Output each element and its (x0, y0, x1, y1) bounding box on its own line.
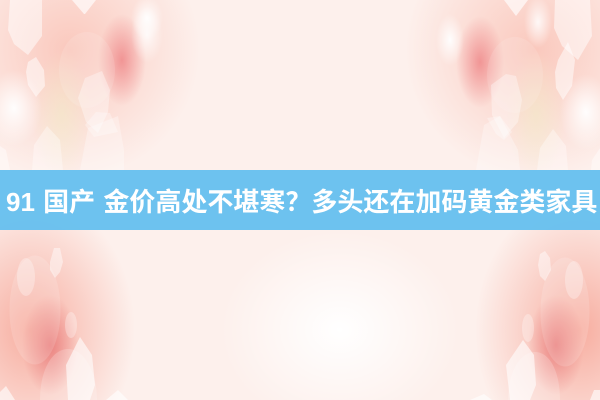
hexagonal bokeh top right (476, 0, 600, 170)
hexagonal bokeh top left (0, 0, 124, 170)
bokeh bottom left (0, 248, 128, 400)
title banner (0, 170, 600, 230)
title: 91 国产 金价高处不堪寒？多头还在加码黄金类家具 (6, 187, 597, 217)
bokeh bottom right (470, 251, 600, 400)
